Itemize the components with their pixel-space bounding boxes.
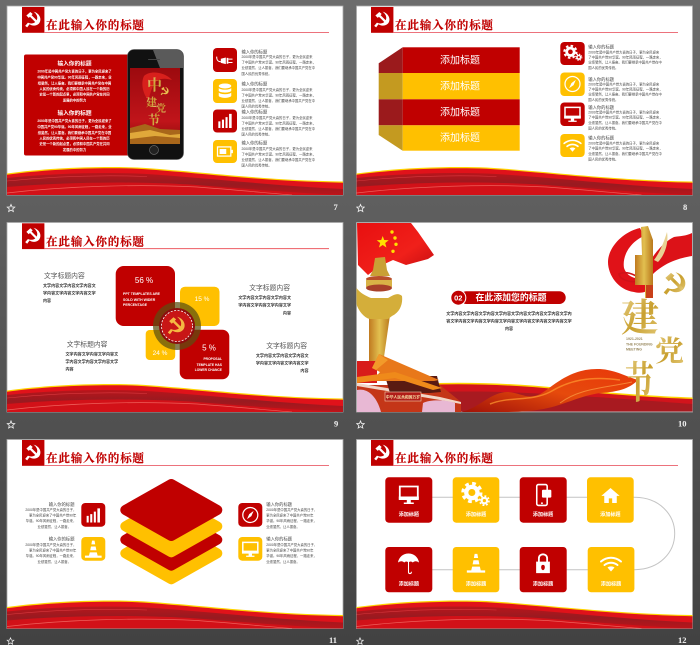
panel: slide 7 [7,6,343,212]
text block lower left: 输入你的标题 [49,536,75,542]
text block 3: 业绩斐然，让人振奋。我们要继承中国共产党在中 [242,126,315,131]
text block 3: 输入你的标题 [242,108,268,116]
step: lock [520,547,567,592]
text block 3: 业绩斐然，让人振奋。我们要继承中国共产党在中 [588,120,662,125]
footer star [357,638,363,644]
connector path [432,497,675,570]
card 5%: 5 % [202,344,216,352]
footer star [357,204,364,212]
text block lower right: 文字内容文字内容文字内容文 [256,352,308,358]
card 24% [146,330,175,360]
text block upper right: 字内容文字内容文字内容文字 [238,302,291,308]
panel: slide 11 [7,440,343,645]
section title pill: 02 [454,293,462,302]
text block 1: 了中国共产党90华诞。90年风雨征程，一路走来， [242,60,316,64]
text block lower right [256,341,308,373]
text block 4: 国人民的优秀传统。 [588,156,618,162]
bottom wave [356,601,692,628]
icon: cone [81,537,105,561]
text block 2: 2000年是中国共产党大喜的日子，更为全民迎来 [242,87,313,92]
footer star [357,421,364,428]
bottom wave [7,384,343,412]
panel: slide 9 [7,222,343,428]
orange ribbon [461,369,638,412]
red text panel: 2000年是中国共产党大喜的日子，更为全民迎来了 [37,118,112,123]
center body text: 文字内容文字内容文字内容文字内容文字内容文字内容文字内容文字内 [446,310,572,316]
text block 2: 业绩斐然，让人振奋。我们要继承中国共产党在中 [588,92,662,96]
header emblem [371,440,393,466]
heading: 在此输入你的标题 [46,451,145,465]
card 15%: 15 % [195,296,210,303]
red text panel: 中国共产党90华诞。90年风雨征程，一路走来，业 [37,74,112,80]
text block lower right: 字内容文字内容文字内容文字 [256,360,308,366]
text block 1: 业绩斐然，让人振奋。我们要继承中国共产党在中 [242,65,315,70]
text block 1: 2000年是中国共产党大喜的日子，更为全民迎来 [588,50,660,54]
text block upper right: 文字标题内容 [249,283,290,292]
card 56%: PERCENTAGE [123,303,148,307]
text block upper left: 文字标题内容 [44,271,85,280]
text block 1: 输入你的标题 [588,44,615,50]
text block lower left [66,340,118,372]
page number: 9 [334,418,338,428]
phone mockup: 建 [146,95,157,109]
text block upper left: 文字内容文字内容文字内容文 [43,282,96,288]
panel: slide 10 [356,222,692,428]
text block 1: 业绩斐然，让人振奋。我们要继承中国共产党在中 [588,60,662,64]
header emblem [22,440,44,466]
bottom wave [436,383,692,412]
header emblem [22,223,44,249]
header emblem [22,7,44,33]
text block 2: 业绩斐然，让人振奋。我们要继承中国共产党在中 [242,98,315,103]
step: phone [520,477,567,523]
header emblem [371,7,393,33]
text block lower right: 业绩斐然，让人振奋。 [266,559,300,564]
text block lower right: 输入你的标题 [266,536,293,542]
center body text: 内容 [505,325,513,331]
icon: bars [81,503,105,527]
page number: 12 [678,635,686,645]
text block upper left: 更为全民迎来了中国共产党90年 [29,512,77,518]
calligraphy title: 党 [655,335,684,368]
section title pill [450,290,566,306]
text block 1: 2000年是中国共产党大喜的日子，更为全民迎来 [242,54,313,59]
bottom wave [7,601,343,628]
center emblem badge [153,302,201,350]
text block 2: 2000年是中国共产党大喜的日子，更为全民迎来 [588,82,660,86]
card 5% [180,330,229,379]
step: wifi: 添加标题 [601,580,621,587]
text block 1: 输入你的标题 [242,48,268,56]
step: phone: 添加标题 [533,511,553,518]
Tiananmen gate: 中华人民共和国万岁 [386,394,420,400]
card 5%: PROPOSAL [203,357,222,361]
card 56%: SOLD WITH WIDER [123,298,156,302]
phone mockup: 中 [147,77,162,94]
3D stacked bars [379,47,520,151]
icon: battery [213,140,237,163]
step: cone [453,547,499,592]
text block 2: 输入你的标题 [242,80,268,88]
text block 3: 输入你的标题 [588,104,615,111]
phone mockup: 节 [148,112,160,127]
step: umbrella [385,547,432,592]
step: house: 添加标题 [600,511,620,518]
calligraphy title [621,298,684,407]
text block 4: 了中国共产党90华诞。90年风雨征程，一路走来， [588,146,663,150]
text block 3: 了中国共产党90华诞。90年风雨征程，一路走来， [242,120,316,126]
text block 4: 业绩斐然，让人振奋。我们要继承中国共产党在中 [588,151,662,156]
step: cone: 添加标题 [466,580,486,587]
english caption: 1921-2021 [626,337,643,341]
3D stacked bars: 添加标题 [440,54,480,66]
red text panel: 发展的中的努力 [63,98,87,102]
3D stacked bars: 添加标题 [440,106,480,118]
text block lower left: 字内容文字内容文字内容文字 [66,358,118,364]
text block 3: 2000年是中国共产党大喜的日子，更为全民迎来 [588,110,660,114]
gold emblem [664,272,685,295]
icon: database [213,79,237,103]
phone mockup [128,50,184,160]
icon: gears [560,42,585,65]
text block 2: 输入你的标题 [588,76,615,83]
text block 4: 了中国共产党90华诞。90年风雨征程，一路走来， [242,152,316,156]
text block lower right: 2000年是中国共产党大喜的日子， [266,542,317,547]
page number: 8 [683,202,687,212]
heading: 在此输入你的标题 [395,18,494,32]
step: gears [453,477,499,523]
text block 4: 业绩斐然，让人振奋。我们要继承中国共产党在中 [242,157,315,162]
text block 4: 2000年是中国共产党大喜的日子，更为全民迎来 [242,146,313,151]
text block lower left: 更为全民迎来了中国共产党90年 [29,548,77,552]
step: wifi [588,547,634,592]
text block upper right [238,283,291,316]
step: gears: 添加标题 [466,511,486,518]
text block 4: 国人民的优秀传统。 [242,162,272,168]
calligraphy title: 建 [621,298,659,340]
red text panel: 输入你的标题 [57,109,92,117]
step: house [587,477,634,523]
text block 3: 2000年是中国共产党大喜的日子，更为全民迎来 [242,115,313,120]
text block 2: 国人民的优秀传统。 [242,104,272,108]
red text panel: 输入你的标题 [57,60,92,68]
red text panel: 发展的中的努力 [63,147,87,152]
red text panel: 人民的优秀传统，必须和中国人民在一个新的历 [39,86,110,91]
page number: 10 [678,418,686,428]
text block lower left: 内容 [66,366,74,372]
text block 1: 国人民的优秀传统。 [242,71,272,76]
card 24%: 24 % [153,350,168,357]
red text panel: 中国共产党90华诞。90年风雨征程，一路走来，业 [37,124,112,129]
footer star [7,638,14,644]
red text panel: 人民的优秀传统，必须和中国人民在一个新的历 [39,136,110,140]
red text panel: 史是一个新的起点里，必须和中国共产党在共同 [39,92,110,96]
calligraphy title: 节 [625,359,654,407]
text block upper right: 业绩斐然，让人振奋。 [266,524,300,529]
text block 2: 国人民的优秀传统。 [588,97,618,102]
center body text: 容文字内容文字内容文字内容文字内容文字内容文字内容文字内容文字 [446,317,572,323]
icon: compass [238,503,262,527]
red text panel [24,54,130,156]
stacked diamonds [125,484,217,579]
heading: 在此输入你的标题 [46,234,145,248]
card 56%: PPT TEMPLATES ARE [123,292,161,296]
bottom wave [356,167,692,195]
text block upper right: 2000年是中国共产党大喜的日子， [266,507,317,512]
text block lower right: 文字标题内容 [266,341,307,350]
text block lower left: 2000年是中国共产党大喜的日子， [25,542,76,547]
text block upper left: 字内容文字内容文字内容文字 [43,289,96,295]
3D stacked bars: 添加标题 [440,131,480,144]
text block upper right: 输入你的标题 [266,501,293,508]
text block upper left: 华诞。90年风雨征程，一路走来， [26,518,76,523]
section title pill: 在此添加您的标题 [476,292,547,302]
page number: 7 [334,202,338,212]
text block upper right: 文字内容文字内容文字内容文 [238,294,291,300]
icon: wifi [560,134,585,157]
icon: bars [213,110,237,132]
card 5%: TEMPLATE HAS [197,363,223,367]
icon: monitor [238,537,262,561]
text block upper right: 华诞。90年风雨征程，一路走来， [266,518,317,523]
text block lower left: 华诞。90年风雨征程，一路走来， [26,553,76,558]
step: umbrella: 添加标题 [399,580,419,587]
step: monitor [385,477,432,523]
card 5%: LOWER CHANCE [195,368,223,372]
text block lower right: 内容 [300,367,308,373]
text block 4: 输入你的标题 [242,140,268,146]
Tiananmen gate [357,354,461,412]
icon: monitor [560,102,585,126]
red text panel: 绩斐然，让人振奋。我们要继承中国共产党在中国 [38,130,112,135]
card 56% [116,266,175,326]
page number: 11 [329,635,337,645]
step: lock: 添加标题 [533,580,553,587]
red text panel: 绩斐然，让人振奋。我们要继承中国共产党在中国 [38,80,112,86]
step: monitor: 添加标题 [399,511,419,518]
text block 3: 国人民的优秀传统。 [242,132,272,136]
bottom wave [7,167,343,195]
footer star [7,204,15,212]
text block upper right: 内容 [283,310,291,316]
text block upper left [43,271,96,303]
red text panel: 史是一个新的起点里，必须和中国共产党在共同 [39,141,110,146]
panel: slide 8 [356,6,692,212]
icon: plug [213,48,237,72]
footer star [7,421,15,428]
red text panel: 2000年是中国共产党大喜的日子，更为全民迎来了 [37,68,112,74]
text block 1: 国人民的优秀传统。 [588,65,618,70]
national flag [357,223,434,275]
phone mockup: 党 [156,102,166,115]
text block 3: 了中国共产党90华诞。90年风雨征程，一路走来， [588,114,663,120]
text block 4: 2000年是中国共产党大喜的日子，更为全民迎来 [588,140,660,146]
text block upper right: 更为全民迎来了中国共产党90年 [266,512,314,518]
text block lower right: 更为全民迎来了中国共产党90年 [266,548,314,552]
text block 1: 了中国共产党90华诞。90年风雨征程，一路走来， [588,54,663,60]
text block lower left: 文字内容文字内容文字内容文 [66,350,118,356]
text block lower left: 业绩斐然，让人振奋。 [38,559,71,564]
text block lower left: 文字标题内容 [67,340,108,348]
heading: 在此输入你的标题 [395,451,494,465]
red silk and column [608,226,692,298]
card 56%: 56 % [135,276,153,285]
text block 2: 了中国共产党90华诞。90年风雨征程，一路走来， [588,86,663,92]
icon: compass [560,72,585,96]
text block lower right: 华诞。90年风雨征程，一路走来， [266,553,317,558]
text block 3: 国人民的优秀传统。 [588,126,618,130]
text block upper left: 2000年是中国共产党大喜的日子， [25,507,76,512]
heading: 在此输入你的标题 [46,18,145,32]
panel: slide 12 [356,440,692,645]
3D stacked bars: 添加标题 [440,80,480,92]
text block 2: 了中国共产党90华诞。90年风雨征程，一路走来， [242,92,316,98]
card 15% [180,287,220,326]
text block 4: 输入你的标题 [588,134,615,142]
huabiao column [356,257,402,364]
text block upper left: 输入你的标题 [49,501,75,508]
text block upper left: 业绩斐然，让人振奋。 [38,524,71,529]
english caption: MEETING [626,348,642,352]
english caption: THE FOUNDING [626,342,653,346]
text block upper left: 内容 [43,297,51,303]
